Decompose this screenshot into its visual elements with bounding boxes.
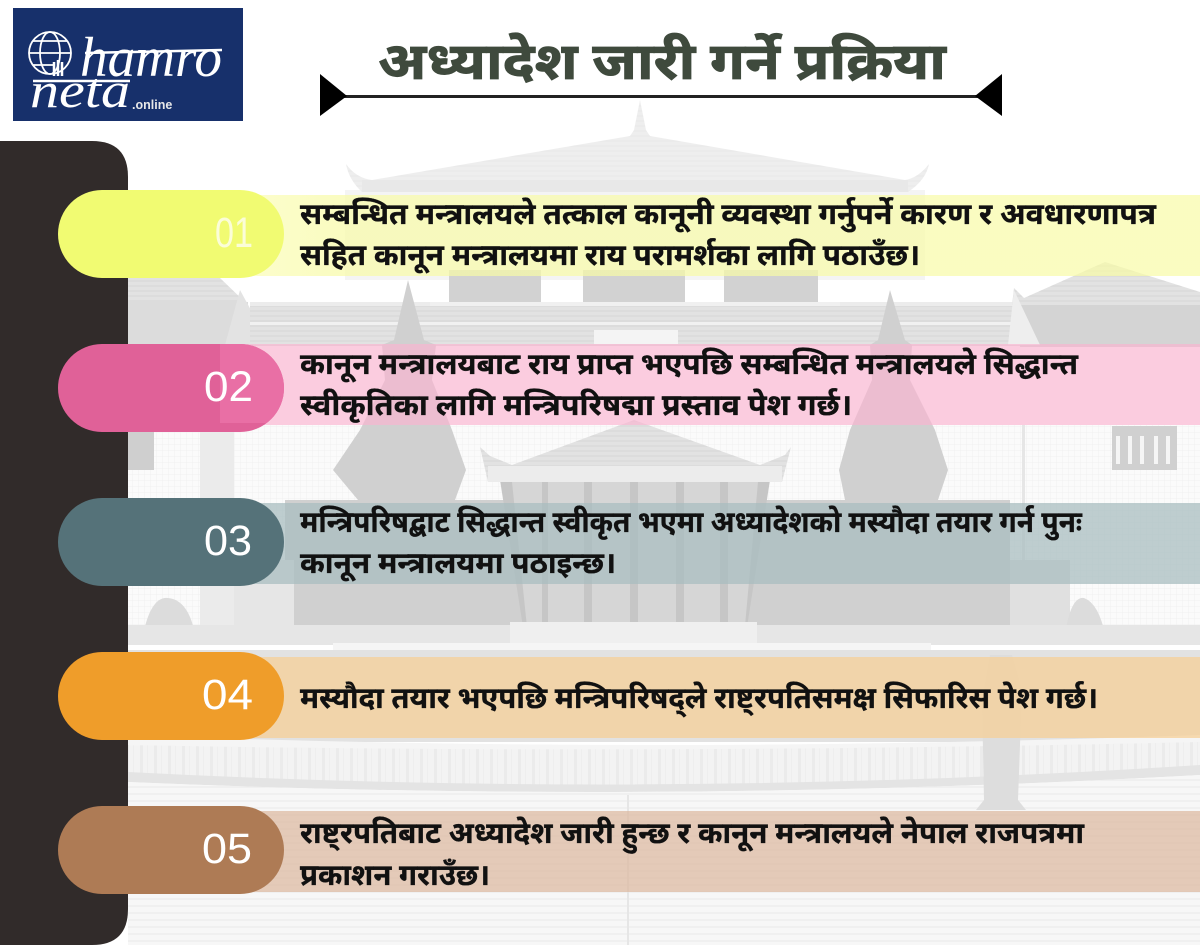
step 05: राष्ट्रपतिबाट अध्यादेश जारी हुन्छ र कानून मन्त्रालयले नेपाल राजपत्रमा: [300, 815, 1085, 856]
step 05: [58, 806, 1200, 898]
logo: Hamro Neta: [13, 8, 243, 121]
right wing gable: [1012, 262, 1200, 305]
step 01: 01: [215, 209, 253, 257]
ring platform: [333, 643, 931, 650]
porch: [500, 480, 770, 640]
logo: Hamro Neta: hamro: [80, 27, 222, 89]
icon: globe: [29, 32, 71, 76]
step 02: कानून मन्त्रालयबाट राय प्राप्त भएपछि सम्बन्धित मन्त्रालयले सिद्धान्त: [300, 346, 1079, 387]
step 01: [58, 190, 1200, 278]
floor: [128, 775, 1200, 945]
step 02: 02: [204, 363, 253, 411]
step 01: सहित कानून मन्त्रालयमा राय परामर्शका लागि पठाउँछ।: [300, 237, 920, 278]
fence: [128, 742, 1200, 792]
lower hall: [285, 500, 1010, 635]
arrow divider under title: [320, 74, 1002, 116]
statue: [976, 655, 1026, 810]
logo: Hamro Neta: neta: [30, 62, 130, 118]
step 05: 05: [202, 825, 252, 873]
left wing roof: [128, 278, 245, 302]
shrubs: [142, 598, 196, 640]
logo: Hamro Neta: .online: [132, 98, 172, 112]
step 05: प्रकाशन गराउँछ।: [300, 857, 490, 898]
step 03: [58, 498, 1200, 586]
upper windows: [449, 270, 541, 302]
title: अध्यादेश जारी गर्ने प्रक्रिया: [378, 32, 947, 100]
step 03: 03: [204, 517, 252, 565]
step 04: 04: [202, 671, 253, 719]
step 01: सम्बन्धित मन्त्रालयले तत्काल कानूनी व्यवस्था गर्नुपर्ने कारण र अवधारणापत्र: [300, 196, 1157, 237]
step 03: मन्त्रिपरिषद्बाट सिद्धान्त स्वीकृत भएमा अध्यादेशको मस्यौदा तयार गर्न पुनः: [300, 504, 1082, 545]
brick wall: [128, 425, 1200, 645]
panel: dark sidebar: [0, 141, 128, 945]
step 04: [58, 652, 1200, 740]
step 04: मस्यौदा तयार भएपछि मन्त्रिपरिषद्ले राष्ट्रपतिसमक्ष सिफारिस पेश गर्छ।: [300, 680, 1098, 721]
background: faded building sketch: [128, 100, 1200, 945]
step 02: [58, 344, 1200, 432]
step 02: स्वीकृतिका लागि मन्त्रिपरिषद्मा प्रस्ताव पेश गर्छ।: [300, 387, 852, 428]
step 03: कानून मन्त्रालयमा पठाइन्छ।: [300, 547, 616, 586]
trees: [333, 280, 475, 600]
middle roof band: [250, 302, 1020, 346]
upper hall and roof: [345, 190, 925, 280]
sign board: [594, 330, 678, 344]
